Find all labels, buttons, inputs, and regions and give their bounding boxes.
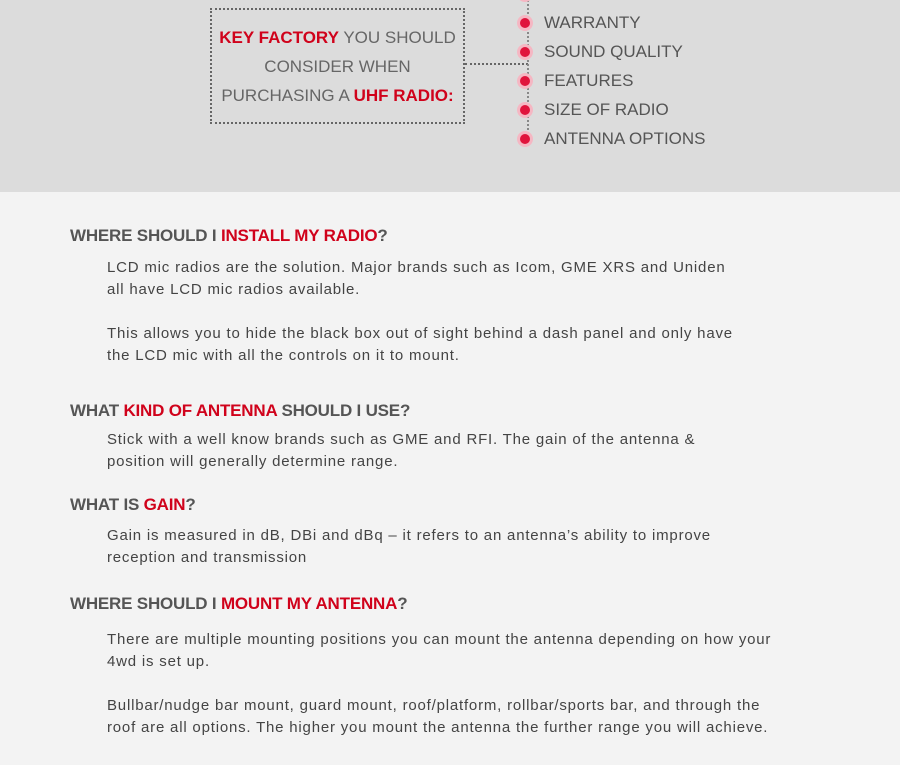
text: antenna [107, 431, 695, 470]
text: antenna: Stick with a well know brands such as GME and RFI. The gain of the antenna & [107, 431, 695, 448]
text: mount [107, 631, 771, 736]
text: antenna: position will generally determine range. [107, 453, 398, 470]
heading: mount: WHERE SHOULD I MOUNT MY ANTENNA? [70, 594, 407, 613]
key factors box: PURCHASING A UHF RADIO: [221, 86, 454, 105]
factor list: ANTENNA OPTIONS [544, 129, 706, 148]
factor list [517, 0, 706, 148]
text: install: This allows you to hide the black box out of sight behind a dash panel and only have [107, 325, 733, 342]
heading: gain: WHAT IS GAIN? [70, 495, 196, 514]
text: install: all have LCD mic radios available. [107, 281, 360, 298]
key factors box: KEY FACTORY YOU SHOULD [219, 28, 456, 47]
text: install: the LCD mic with all the controls on it to mount. [107, 347, 460, 364]
heading: antenna: WHAT KIND OF ANTENNA SHOULD I USE? [70, 401, 410, 420]
key factors box [210, 8, 465, 124]
heading: install: WHERE SHOULD I INSTALL MY RADIO? [70, 226, 388, 245]
text: mount: There are multiple mounting positions you can mount the antenna depending on how your [107, 631, 771, 648]
text: mount: Bullbar/nudge bar mount, guard mount, roof/platform, rollbar/sports bar, and through the [107, 697, 760, 714]
connector [465, 63, 528, 65]
text: install: LCD mic radios are the solution. Major brands such as Icom, GME XRS and Uniden [107, 259, 725, 276]
factor list: SIZE OF RADIO [544, 100, 669, 119]
key factors box: CONSIDER WHEN [264, 57, 411, 76]
factor list: FEATURES [544, 71, 633, 90]
text: gain: Gain is measured in dB, DBi and dBq – it refers to an antenna’s ability to improve [107, 527, 711, 544]
top band [0, 0, 900, 192]
text: gain: reception and transmission [107, 549, 307, 566]
text: install [107, 259, 733, 364]
text: gain [107, 527, 711, 566]
text: mount: 4wd is set up. [107, 653, 210, 670]
factor list: WARRANTY [544, 13, 641, 32]
text: mount: roof are all options. The higher you mount the antenna the further range you will achieve. [107, 719, 768, 736]
factor list: SOUND QUALITY [544, 42, 683, 61]
